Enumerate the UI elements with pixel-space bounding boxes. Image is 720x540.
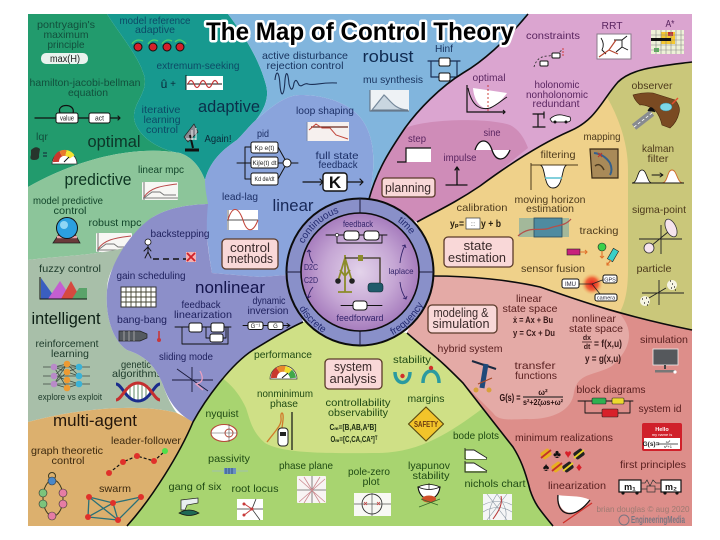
label: controllability observability [326, 397, 391, 419]
label: nonlinear state equations: dx [583, 335, 591, 342]
chart: pole-zero plot [354, 493, 391, 516]
label: system id: system id [638, 403, 682, 415]
label: fuzzy control: fuzzy control [39, 263, 101, 275]
icon: mass spring masses: m₂ [665, 482, 677, 492]
label: calibration: calibration [456, 202, 508, 214]
icon: playing card suits [540, 447, 585, 474]
icon: backstepping figure [144, 239, 196, 262]
icon: hello name badge: Hello [655, 427, 669, 433]
callout: control methods: control [230, 241, 270, 255]
icon: resistor [212, 468, 248, 474]
icon: leader-follower chain [106, 448, 168, 476]
icon: SAFETY sign [408, 407, 444, 441]
icon: graph theoretic ring [39, 472, 67, 520]
callout: modeling & simulation [428, 305, 497, 333]
callout: state estimation: estimation [448, 251, 506, 265]
label: transfer function formula: G(s) = [500, 393, 521, 404]
chart: optimal cost curve [467, 85, 507, 114]
label: feedforward: feedforward [336, 313, 384, 323]
icon: lyapunov bowl [418, 483, 440, 507]
panel: state estimation [417, 62, 692, 330]
icon: centrifugal governor and engine [335, 255, 383, 292]
label: constraints: constraints [526, 30, 580, 42]
label: pontryagin's maximum principle [37, 19, 95, 51]
label: frequency: frequency [390, 302, 424, 335]
label: pid: pid [257, 128, 269, 140]
label: nonlinear state space: nonlinear [572, 313, 617, 325]
icon: filter response [531, 163, 578, 190]
chart: lead-lag [227, 210, 258, 230]
label: genetic algorithms: genetic [121, 359, 151, 371]
label: simulation: simulation [640, 334, 688, 346]
label: linear state equations [513, 315, 555, 339]
label: controllability observability: controllability [326, 397, 391, 409]
icon: max(H): max(H) [50, 54, 80, 65]
label: D2C C2D: D2C [304, 262, 318, 272]
label: model predictive control: control [54, 205, 86, 217]
label: block diagrams: block diagrams [576, 384, 646, 396]
callout: state estimation [444, 237, 513, 267]
label: nonminimum phase: nonminimum [257, 388, 313, 400]
label: controllability observability: observability [328, 407, 389, 419]
icon: mass spring masses [619, 480, 681, 495]
label: reinforcement learning: learning [51, 348, 89, 360]
label: leader-follower: leader-follower [111, 435, 182, 447]
label: pole-zero plot [348, 466, 390, 488]
icon: colored block diagram [578, 398, 633, 417]
icon: hello name badge: s²+1 [664, 444, 673, 449]
heading: intelligent: intelligent [32, 309, 101, 328]
label: iterative learning control: iterative [142, 104, 181, 116]
label: kalman filter [642, 143, 674, 165]
label: observer: observer [632, 80, 673, 92]
label: model predictive control: model predictive [33, 195, 103, 207]
label: lyapunov stability [408, 460, 451, 482]
panel: intelligent [28, 247, 177, 422]
icon: pid block diagram [237, 142, 298, 185]
icon: hello name badge: my name is [652, 432, 672, 437]
label: feedback linearization: feedback [182, 299, 221, 311]
label: hamilton-jacobi-bellman equation: equation [68, 87, 108, 99]
label: active disturbance rejection control: rejection control [266, 60, 344, 72]
label: backstepping: backstepping [150, 228, 210, 240]
icon: sensor fusion: camera [597, 296, 616, 302]
label: sensor fusion: sensor fusion [521, 263, 585, 275]
icon: extremum-seeking signal: + [170, 79, 176, 90]
label: bang-bang: bang-bang [117, 314, 167, 326]
callout: planning: planning [385, 181, 431, 195]
icon: conversion arrows left [306, 250, 313, 298]
label: filtering: filtering [540, 149, 576, 161]
label: phase plane: phase plane [279, 460, 333, 472]
label: Engineering Media logo [619, 515, 685, 526]
icon: robot and car [533, 112, 571, 127]
label: full state feedback: full state [316, 150, 359, 162]
icon: inversion blocks [243, 322, 290, 330]
callout: control methods: methods [227, 252, 273, 266]
heading: multi-agent: multi-agent [53, 411, 137, 430]
label: margins: margins [408, 393, 444, 405]
callout: system analysis: system [334, 360, 372, 374]
label: holonomic nonholonomic redundant: nonholonomic [526, 89, 588, 101]
label: nichols chart: nichols chart [464, 478, 526, 490]
label: bode plots: bode plots [453, 430, 499, 442]
label: linear state space [502, 293, 558, 315]
label: linear state equations: y = Cx + Du [513, 328, 555, 339]
label: minimum realizations: minimum realizations [515, 432, 613, 444]
label: passivity: passivity [208, 453, 251, 465]
icon: playing card suits: ♣ [553, 447, 561, 461]
label: nonlinear state space [569, 313, 623, 335]
label: holonomic nonholonomic redundant [526, 79, 588, 110]
label: reinforcement learning [36, 338, 99, 360]
chart: loop shaping [307, 122, 349, 141]
chart: bode plots [465, 448, 487, 472]
label: extremum-seeking: extremum-seeking [156, 60, 240, 72]
label: mu synthesis: mu synthesis [363, 74, 423, 86]
icon: calibration equation: y + b [481, 219, 501, 230]
heading: nonlinear: nonlinear [195, 278, 265, 297]
label: kalman filter: filter [648, 153, 669, 165]
icon: hybrid hopping robot [472, 361, 496, 392]
heading: predictive: predictive [64, 170, 132, 189]
heading: adaptive: adaptive [198, 97, 260, 116]
label: loop shaping: loop shaping [296, 105, 354, 117]
icon: neural network [43, 361, 90, 391]
chart: nyquist [211, 424, 237, 442]
label: transfer functions [514, 360, 557, 382]
label: time: time [398, 216, 414, 234]
panel: adaptive [107, 14, 267, 180]
callout: state estimation: state [464, 239, 493, 253]
label: active disturbance rejection control: active disturbance [262, 50, 348, 62]
label: mapping: mapping [584, 131, 621, 143]
icon: sensor fusion: GPS [604, 278, 616, 284]
chart: phase plane [297, 476, 326, 503]
label: gang of six: gang of six [168, 481, 222, 493]
label: sine: sine [484, 127, 501, 139]
icon: playing card suits: ♠ [543, 460, 550, 474]
label: swarm: swarm [99, 483, 131, 495]
label: nonlinear state equations: = f(x,u) [594, 339, 622, 350]
icon: stability bowl and hill [395, 366, 439, 383]
heading: linear: linear [272, 196, 314, 215]
icon: observer mountain with road [633, 93, 680, 128]
label: moving horizon estimation: estimation [526, 203, 574, 215]
icon: calibration equation: yₚ= [450, 219, 464, 230]
icon: sensor fusion [562, 273, 617, 302]
label: pontryagin's maximum principle: principle [48, 39, 85, 51]
icon: sine signal [475, 141, 510, 159]
icon: K gain block: K [329, 173, 342, 192]
label: iterative learning control [142, 104, 181, 136]
label: model reference adaptive: adaptive [135, 24, 175, 36]
chart: particle [640, 278, 684, 306]
icon: RRT tree [597, 34, 631, 59]
icon: car and nonminimum path [267, 412, 292, 450]
icon: inversion blocks: G⁻¹ [251, 324, 260, 330]
chart: nichols chart [483, 494, 512, 520]
callout: system analysis: analysis [330, 372, 376, 386]
icon: hello name badge: ω² [666, 439, 671, 444]
label: sigma-point: sigma-point [632, 204, 686, 216]
label: linear mpc: linear mpc [138, 164, 184, 176]
chart: gain scheduling table [121, 287, 156, 307]
icon: hello name badge: G(s)= [643, 441, 660, 448]
label: model reference adaptive [120, 15, 191, 36]
label: dynamic inversion [248, 295, 289, 317]
label: holonomic nonholonomic redundant: holonomic [534, 79, 580, 91]
label: root locus: root locus [232, 483, 278, 495]
panel: multi-agent [28, 408, 193, 526]
label: iterative learning control: learning [144, 114, 181, 126]
label: nonlinear state equations: dt [584, 344, 591, 351]
icon: rocket and thermometer [119, 331, 161, 342]
label: continuous: continuous [300, 208, 338, 243]
label: model reference adaptive: model reference [120, 15, 191, 27]
icon: pid block diagram: Kd de/dt [254, 177, 275, 183]
icon: treasure map [590, 149, 618, 178]
label: A*: A* [666, 18, 674, 30]
label: dynamic inversion: dynamic [252, 295, 286, 307]
label: discrete: discrete [300, 306, 326, 332]
label: pontryagin's maximum principle: pontryagin's [37, 19, 95, 31]
label: sliding mode: sliding mode [159, 351, 213, 363]
icon: value and actor block diagram [35, 106, 120, 123]
label: iterative learning control: control [146, 124, 178, 136]
label: Engineering Media logo: EngineeringMedia [631, 515, 685, 526]
icon: transform arrows right [400, 245, 407, 299]
label: active disturbance rejection control [262, 50, 348, 72]
label: linear state space: linear [516, 293, 543, 305]
panel: robust [228, 14, 528, 199]
icon: playing card suits: ♦ [576, 460, 582, 474]
label: lyapunov stability: stability [412, 470, 450, 482]
label: kalman filter: kalman [642, 143, 674, 155]
label: linear state equations: ẋ = Ax + Bu [513, 315, 553, 326]
label: RRT: RRT [602, 20, 623, 32]
icon: swarm network [85, 494, 144, 523]
panel: predictive [28, 151, 208, 260]
label: genetic algorithms: algorithms [112, 368, 162, 380]
icon: pid block diagram: Ki∫e(t) dt [252, 160, 277, 167]
label: nonlinear state space: state space [569, 323, 623, 335]
icon: computer monitor [653, 349, 678, 374]
panel: planning [369, 14, 692, 222]
label: lqr: lqr [36, 131, 49, 143]
title: The Map of Control Theory [206, 18, 514, 46]
label: gain scheduling: gain scheduling [116, 270, 186, 282]
label: pontryagin's maximum principle: maximum [44, 29, 89, 41]
icon: extremum-seeking signal: û [161, 77, 167, 91]
label: genetic algorithms [112, 359, 162, 380]
label: step: step [408, 133, 426, 145]
chart: robust mpc [96, 233, 132, 252]
icon: inversion blocks: G [273, 324, 278, 330]
icon: hello name badge [642, 423, 682, 451]
label: transfer function formula: ω² [538, 388, 548, 397]
label: dynamic inversion: inversion [248, 305, 289, 317]
icon: mass spring masses: m₁ [624, 482, 636, 492]
label: particle: particle [636, 263, 672, 275]
callout: system analysis [325, 359, 382, 389]
panel: system analysis [127, 322, 553, 526]
label: laplace: laplace [388, 266, 414, 276]
label: tracking: tracking [580, 225, 619, 237]
icon: lamp [184, 124, 199, 150]
label: reinforcement learning: reinforcement [36, 338, 99, 350]
label: pole-zero plot: pole-zero [348, 466, 390, 478]
label: feedback linearization: linearization [174, 309, 232, 321]
label: graph theoretic control: control [52, 455, 84, 467]
icon: red balls with green arcs [132, 40, 186, 51]
label: controllability formulas [330, 422, 378, 444]
label: impulse: impulse [444, 152, 477, 164]
icon: calibration equation [450, 218, 501, 230]
label: first principles: first principles [620, 459, 686, 471]
label: stability: stability [393, 354, 432, 366]
chart: moving horizon [518, 218, 571, 237]
icon: tangent on curve [558, 495, 592, 523]
label: lyapunov stability: lyapunov [408, 460, 451, 472]
icon: Hinf block diagram [428, 58, 460, 81]
icon: pid block diagram: Kp e(t) [254, 146, 274, 152]
icon: feedback linearization blocks [175, 323, 231, 344]
label: moving horizon estimation [514, 194, 586, 215]
label: nonminimum phase [257, 388, 313, 410]
icon: feedforward block diagram [341, 301, 382, 310]
icon: gang of six pistol and hat [179, 498, 199, 516]
label: transfer functions: transfer [514, 360, 556, 372]
decorative borders [127, 14, 692, 526]
panel: modeling and simulation [407, 276, 692, 526]
chart: fuzzy control [40, 277, 87, 299]
label: performance: performance [254, 349, 312, 361]
label: nonlinear state equations: y = g(x,u) [585, 354, 621, 365]
panel: linear [205, 95, 373, 277]
callout: control methods [222, 239, 278, 269]
icon: step signal [397, 148, 431, 162]
icon: crystal ball [53, 218, 80, 243]
panel: optimal [28, 14, 180, 187]
label: hybrid system: hybrid system [438, 343, 503, 355]
chart: mu synthesis [370, 90, 409, 111]
label: holonomic nonholonomic redundant: redundant [532, 98, 580, 110]
heading: robust: robust [362, 47, 414, 66]
label: optimal path: optimal [472, 72, 506, 84]
icon: extremum-seeking signal [161, 75, 223, 91]
label: nonlinear state equations [582, 335, 622, 365]
icon: lqr equals gauge [30, 147, 77, 164]
icon: A* grid [651, 30, 684, 54]
icon: playing card suits: ♥ [564, 447, 572, 461]
label: model predictive control [33, 195, 103, 217]
label: full state feedback: feedback [318, 159, 358, 171]
icon: kalman distributions [632, 170, 684, 183]
callout: modeling & simulation: modeling & [434, 306, 489, 320]
label: graph theoretic control [31, 445, 103, 467]
label: moving horizon estimation: moving horizon [514, 194, 586, 206]
icon: tracking objects [567, 243, 619, 265]
chart: linear mpc [142, 182, 178, 200]
label: Hinf: Hinf [435, 43, 453, 55]
icon: calibration equation: ::: [470, 222, 476, 228]
chart: root locus [237, 499, 263, 520]
icon: K gain block [303, 173, 363, 192]
chart: sliding mode phase plot [172, 367, 213, 392]
label: full state feedback [316, 150, 359, 171]
label: feedback: feedback [343, 219, 373, 229]
icon: DNA helix [116, 383, 160, 401]
label: linear state space: state space [502, 303, 558, 315]
label: pole-zero plot: plot [362, 476, 380, 488]
label: lead-lag: lead-lag [222, 191, 258, 203]
label: feedback linearization [174, 299, 232, 321]
panel: central hub [286, 198, 434, 346]
icon: SAFETY sign: SAFETY [414, 420, 439, 429]
callout: modeling & simulation: simulation [432, 317, 490, 331]
icon: feedback loop block diagram [326, 231, 387, 243]
label: explore vs exploit: explore vs exploit [38, 392, 102, 402]
label: nyquist: nyquist [206, 408, 239, 420]
chart: sigma-point [639, 217, 682, 254]
label: D2C C2D: C2D [304, 275, 318, 285]
label: robust mpc: robust mpc [88, 217, 142, 229]
icon: max(H) [41, 53, 88, 65]
label: controllability formulas: Oₘ=[C,CA,CA²]ᵀ [330, 434, 378, 444]
callout: planning [382, 178, 435, 197]
label: transfer function formula [500, 388, 563, 407]
icon: value and actor block diagram: value [60, 116, 74, 122]
icon: impulse signal [446, 167, 467, 185]
label: graph theoretic control: graph theoretic [31, 445, 103, 457]
label: D2C C2D [304, 262, 318, 285]
icon: sensor fusion: IMU [565, 282, 576, 288]
panel: nonlinear [107, 204, 303, 422]
label: hamilton-jacobi-bellman equation: hamilton-jacobi-bellman [30, 77, 141, 89]
label: controllability formulas: Cₘ=[B,AB,A²B] [330, 422, 377, 432]
icon: value and actor block diagram: act [95, 116, 104, 122]
label: linearization: linearization [548, 480, 606, 492]
label: hamilton-jacobi-bellman equation [30, 77, 141, 99]
label: Again!: Again! [204, 134, 232, 145]
heading: optimal: optimal [88, 132, 140, 151]
label: nonminimum phase: phase [270, 398, 298, 410]
label: transfer functions: functions [515, 370, 557, 382]
chart: active disturbance decaying signal [275, 73, 337, 94]
label: transfer function formula: s²+2ζωs+ω² [523, 398, 563, 407]
icon: performance gauge [270, 366, 297, 379]
icon: constraints path [534, 48, 563, 67]
label: credit: brian douglas © aug 2020 [596, 504, 690, 514]
